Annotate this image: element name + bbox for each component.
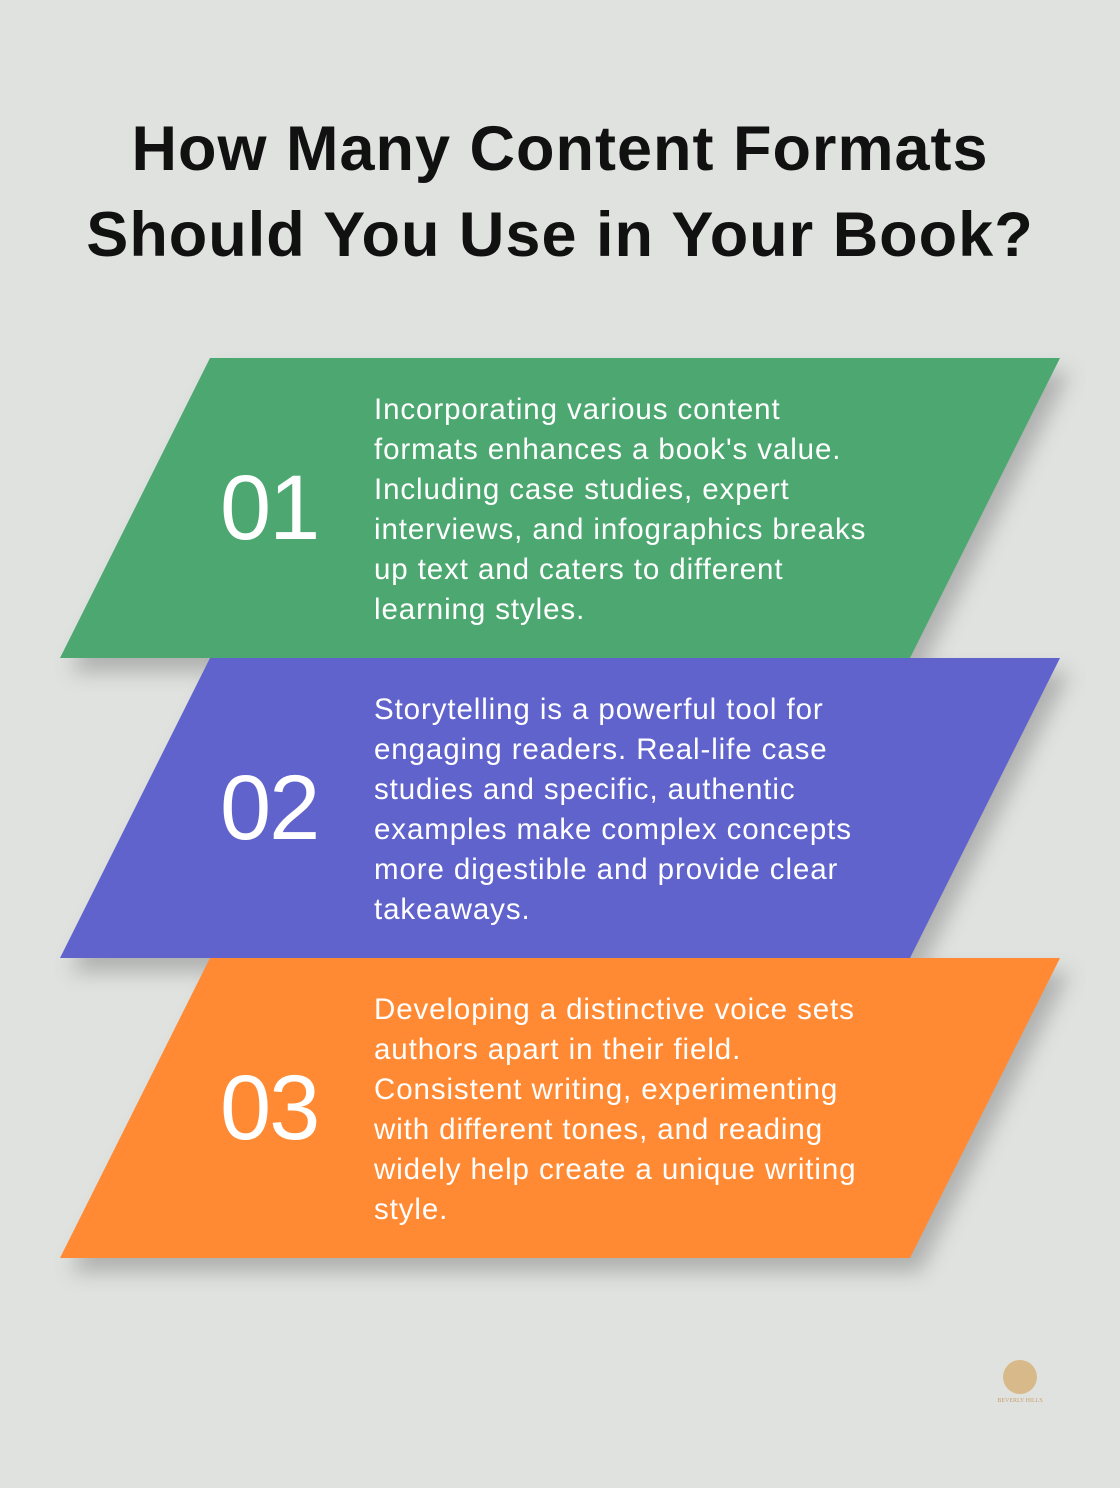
text 03: Developing a distinctive voice sets bbox=[374, 993, 855, 1026]
title bbox=[86, 114, 1034, 270]
text 01: Including case studies, expert bbox=[374, 473, 790, 506]
text 02: examples make complex concepts bbox=[374, 813, 852, 846]
text 03 bbox=[374, 993, 856, 1226]
text 03: style. bbox=[374, 1193, 448, 1226]
text 02: more digestible and provide clear bbox=[374, 853, 838, 886]
text 01: learning styles. bbox=[374, 593, 585, 626]
text 01: Incorporating various content bbox=[374, 393, 781, 426]
text 01: up text and caters to different bbox=[374, 553, 783, 586]
number 03: 03 bbox=[220, 1057, 318, 1159]
panel: 03 bbox=[60, 958, 1060, 1258]
text 02: engaging readers. Real-life case bbox=[374, 733, 828, 766]
text 03: Consistent writing, experimenting bbox=[374, 1073, 838, 1106]
text 03: with different tones, and reading bbox=[374, 1113, 823, 1146]
title: Should You Use in Your Book? bbox=[86, 200, 1034, 270]
panel: 01 bbox=[60, 358, 1060, 658]
text 02: Storytelling is a powerful tool for bbox=[374, 693, 824, 726]
text 02: studies and specific, authentic bbox=[374, 773, 795, 806]
logo bbox=[997, 1360, 1043, 1404]
panel: 02 bbox=[60, 658, 1060, 958]
text 02 bbox=[374, 693, 852, 926]
number 01: 01 bbox=[220, 457, 318, 559]
text 01 bbox=[374, 393, 866, 626]
text 01: interviews, and infographics breaks bbox=[374, 513, 866, 546]
text 02: takeaways. bbox=[374, 893, 531, 926]
logo: BEVERLY HILLS bbox=[997, 1398, 1043, 1404]
title: How Many Content Formats bbox=[131, 114, 989, 184]
text 03: widely help create a unique writing bbox=[374, 1153, 856, 1186]
text 01: formats enhances a book's value. bbox=[374, 433, 841, 466]
number 02: 02 bbox=[220, 757, 318, 859]
text 03: authors apart in their field. bbox=[374, 1033, 741, 1066]
